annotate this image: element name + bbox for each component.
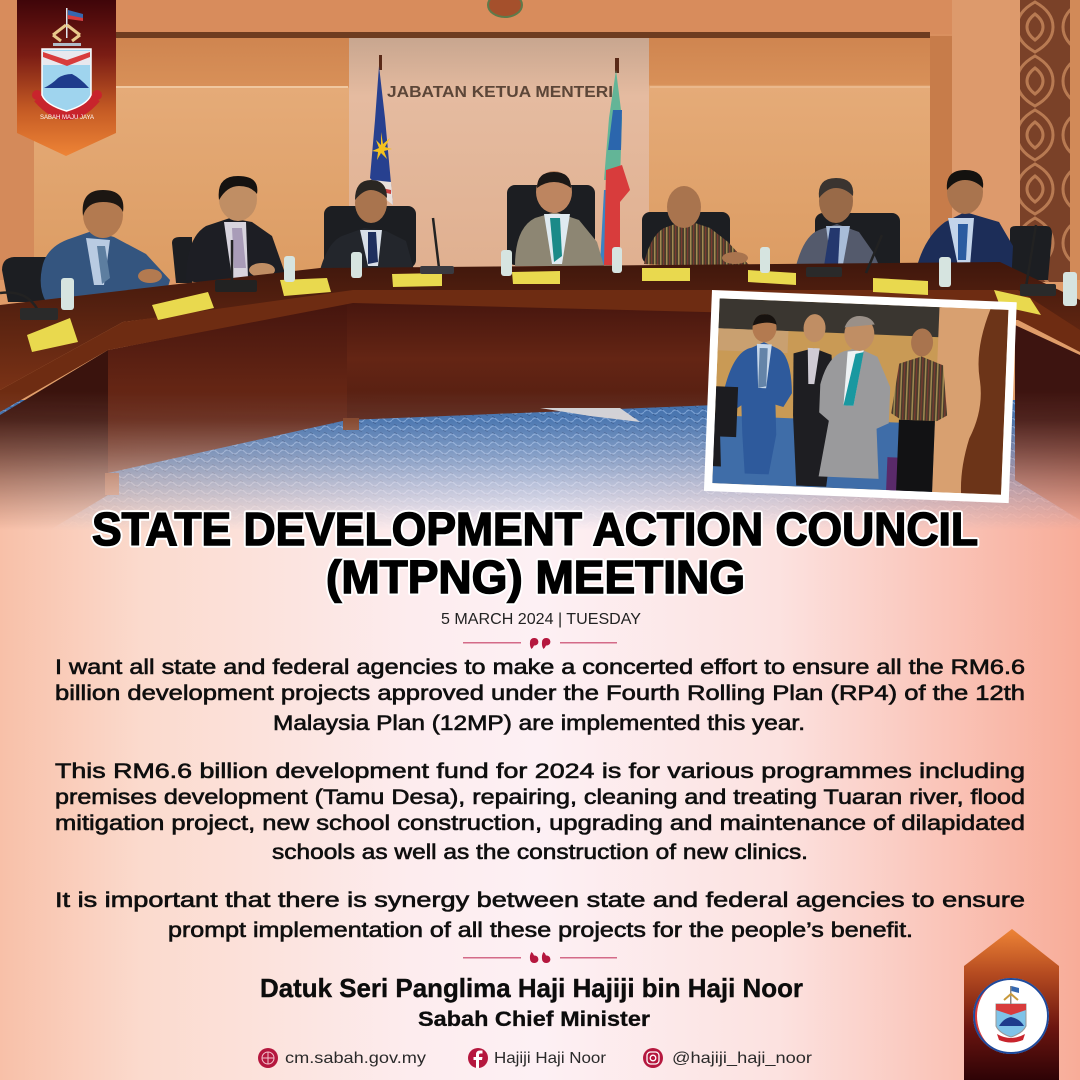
paragraph 2: premises development (Tamu Desa), repairing, cleaning and treating Tuaran river, flood	[55, 786, 1025, 809]
wood carving	[961, 308, 1008, 495]
carved wood column	[1020, 0, 1070, 282]
title: STATE DEVELOPMENT ACTION COUNCIL	[92, 503, 978, 555]
paragraph 2	[55, 760, 1025, 864]
ribbon	[964, 929, 1059, 1080]
person 5	[644, 186, 750, 270]
paragraph 1: I want all state and federal agencies to make a concerted effort to ensure all the RM6.6	[55, 656, 1025, 679]
badge: Hala Tuju Sabah Maju Jaya	[973, 978, 1049, 1054]
title	[92, 503, 978, 603]
chairs	[2, 185, 1052, 302]
icon: globe	[258, 1048, 278, 1068]
person in blue suit	[725, 314, 792, 474]
background: meeting room photo	[0, 0, 1080, 560]
person in black suit	[793, 314, 832, 487]
paragraph 3: prompt implementation of all these projects for the people’s benefit.	[168, 919, 913, 942]
person 2	[186, 176, 286, 282]
table: carpet floor	[0, 400, 1080, 540]
attribution: name: Datuk Seri Panglima Haji Hajiji bin Haji Noor	[260, 973, 803, 1003]
person 7	[915, 170, 1013, 286]
footer: website: cm.sabah.gov.my	[285, 1050, 426, 1067]
title: (MTPNG) MEETING	[326, 551, 745, 603]
wall crest	[488, 0, 522, 17]
opening quote ornament	[463, 638, 617, 649]
bottom-right ribbon with badge	[964, 929, 1059, 1080]
date: 5 MARCH 2024 | TUESDAY	[441, 611, 641, 628]
icon: instagram	[643, 1048, 663, 1068]
flag: Sabah	[600, 58, 630, 265]
table: name plates	[27, 268, 1041, 352]
footer: instagram	[643, 1048, 813, 1068]
person 3	[320, 180, 414, 270]
person in batik shirt	[891, 328, 948, 492]
chair	[713, 386, 738, 467]
person 1	[41, 190, 170, 302]
footer: facebook	[468, 1048, 607, 1068]
right pillar	[952, 0, 1022, 280]
footer: instagram: @hajiji_haji_noor	[672, 1050, 813, 1067]
top-left ribbon with state emblem	[17, 0, 116, 156]
state emblem	[32, 8, 102, 121]
person in grey suit with teal tie	[817, 314, 893, 479]
right wall panel	[649, 38, 931, 270]
paragraph 1	[55, 656, 1025, 735]
footer: facebook: Hajiji Haji Noor	[494, 1050, 607, 1067]
inset photo scene	[712, 298, 1008, 495]
table: top surface	[0, 262, 1080, 412]
inset photo frame	[704, 290, 1017, 503]
table: bottles and microphones	[0, 218, 1077, 320]
paragraph 3	[55, 889, 1025, 942]
central sign panel	[349, 38, 649, 270]
paragraph 2: mitigation project, new school construction, upgrading and maintenance of dilapidated	[55, 812, 1025, 835]
wall	[0, 0, 1080, 420]
footer: website	[258, 1048, 426, 1068]
paragraph 1: Malaysia Plan (12MP) are implemented this year.	[273, 712, 805, 735]
title: STATE DEVELOPMENT ACTION COUNCIL	[92, 503, 978, 555]
state emblem: SABAH MAJU JAYA	[40, 115, 94, 121]
paragraph 2: schools as well as the construction of new clinics.	[272, 841, 808, 864]
inset photo	[704, 290, 1017, 503]
person 4	[515, 171, 604, 266]
person 6	[795, 178, 882, 272]
upper wall band	[0, 0, 1080, 34]
scroll	[38, 98, 96, 115]
sign: department name: JABATAN KETUA MENTERI	[387, 84, 613, 101]
closing quote ornament	[463, 952, 617, 963]
ribbon	[17, 0, 116, 156]
title: (MTPNG) MEETING	[326, 551, 745, 603]
flag: Malaysia	[370, 55, 393, 205]
paragraph 2: This RM6.6 billion development fund for 2024 is for various programmes including	[55, 760, 1025, 783]
left wall panel	[34, 38, 350, 278]
paragraph 3: It is important that there is synergy between state and federal agencies to ensure	[55, 889, 1025, 912]
paragraph 1: billion development projects approved under the Fourth Rolling Plan (RP4) of the 12th	[55, 682, 1025, 705]
paper background fade	[0, 390, 1080, 1080]
icon: facebook	[468, 1048, 488, 1068]
table: front panels	[0, 298, 1080, 560]
attribution: role: Sabah Chief Minister	[418, 1008, 650, 1031]
